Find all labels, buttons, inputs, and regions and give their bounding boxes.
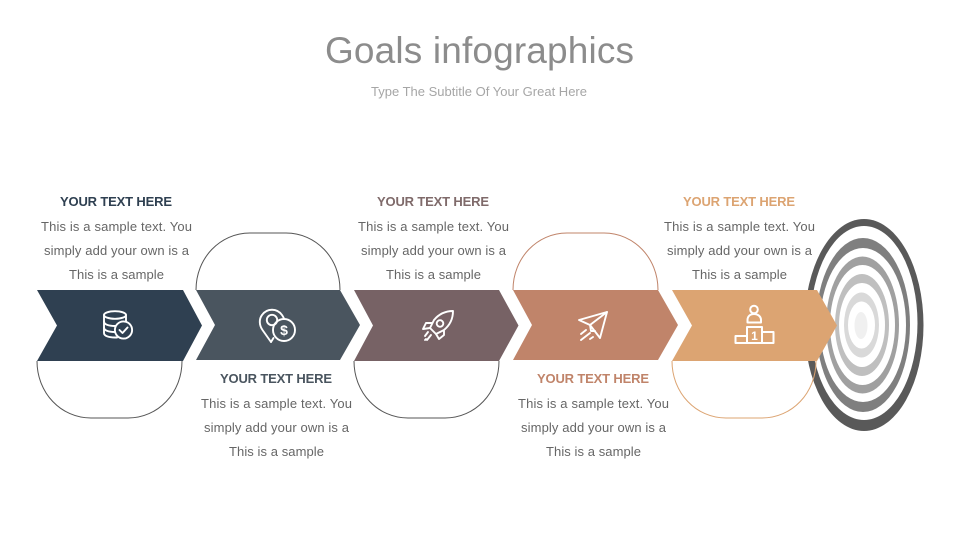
outline: step 1 bottom arc bbox=[37, 361, 182, 418]
icon: rocket bbox=[423, 311, 453, 340]
icon: podium bbox=[736, 306, 774, 343]
text block: step 2: This is a sample bbox=[229, 444, 324, 459]
text block: step 1: simply add your own is a bbox=[44, 243, 190, 258]
text block: step 2: This is a sample text. You bbox=[201, 396, 352, 411]
outline: step 3 bottom arc bbox=[354, 361, 499, 418]
text block: step 3: This is a sample text. You bbox=[358, 219, 509, 234]
outline: step 4 top arc bbox=[513, 233, 658, 290]
title: Goals infographics bbox=[325, 30, 634, 71]
text block: step 4: This is a sample text. You bbox=[518, 396, 669, 411]
chevron: step 2 bbox=[196, 290, 360, 360]
text block: step 2 bbox=[201, 371, 352, 459]
text block: step 1: YOUR TEXT HERE bbox=[60, 194, 172, 209]
text block: step 5: simply add your own is a bbox=[667, 243, 813, 258]
target graphic bbox=[804, 219, 924, 431]
icon: location pin with dollar bbox=[260, 310, 295, 342]
text block: step 5: This is a sample bbox=[692, 267, 787, 282]
text block: step 3: This is a sample bbox=[386, 267, 481, 282]
icon: location pin with dollar: $ bbox=[280, 322, 288, 338]
chevron: step 1 bbox=[37, 290, 202, 361]
text block: step 1 bbox=[41, 194, 192, 282]
text block: step 3: YOUR TEXT HERE bbox=[377, 194, 489, 209]
text block: step 4: This is a sample bbox=[546, 444, 641, 459]
icon: database with check bbox=[104, 311, 132, 339]
chevron: step 3 bbox=[354, 290, 518, 361]
text block: step 4: simply add your own is a bbox=[521, 420, 667, 435]
chevron: step 5 bbox=[672, 290, 837, 361]
icon: paper plane bbox=[579, 312, 607, 340]
text block: step 4 bbox=[518, 371, 669, 459]
text block: step 4: YOUR TEXT HERE bbox=[537, 371, 649, 386]
chevron: step 4 bbox=[513, 290, 678, 360]
text block: step 1: This is a sample text. You bbox=[41, 219, 192, 234]
text block: step 3 bbox=[358, 194, 509, 282]
text block: step 3: simply add your own is a bbox=[361, 243, 507, 258]
outline: step 2 top arc bbox=[196, 233, 340, 290]
text block: step 5 bbox=[664, 194, 815, 282]
outline: step 5 bottom arc bbox=[672, 361, 816, 418]
text block: step 2: YOUR TEXT HERE bbox=[220, 371, 332, 386]
text block: step 1: This is a sample bbox=[69, 267, 164, 282]
icon: podium: 1 bbox=[751, 329, 758, 343]
text block: step 5: YOUR TEXT HERE bbox=[683, 194, 795, 209]
text block: step 5: This is a sample text. You bbox=[664, 219, 815, 234]
subtitle: Type The Subtitle Of Your Great Here bbox=[371, 84, 587, 99]
text block: step 2: simply add your own is a bbox=[204, 420, 350, 435]
